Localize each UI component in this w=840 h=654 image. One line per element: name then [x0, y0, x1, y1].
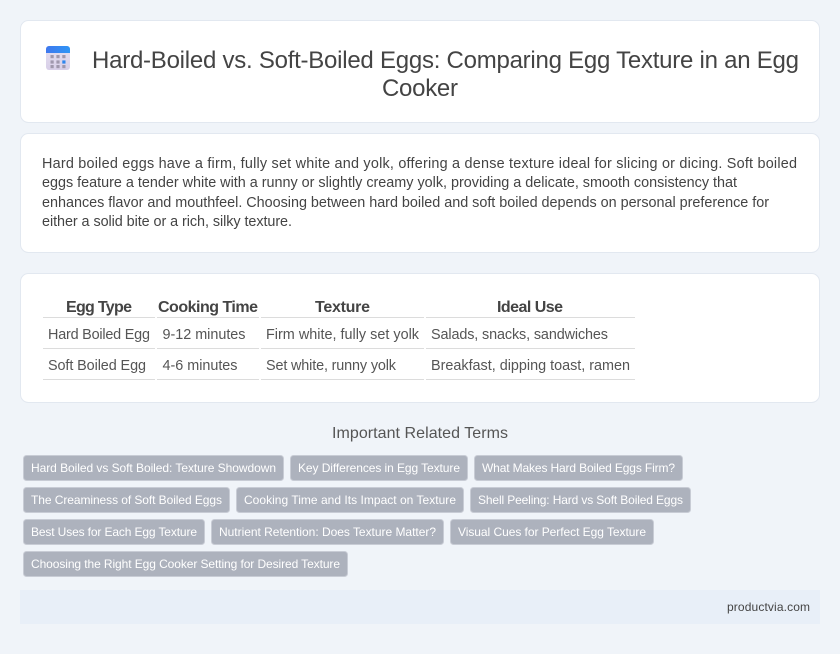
- related term tags: [24, 456, 690, 576]
- related term tags: Shell Peeling: Hard vs Soft Boiled Eggs: [478, 493, 683, 507]
- related term tags: Choosing the Right Egg Cooker Setting for Desired Texture: [31, 557, 340, 571]
- panel: summary paragraph: [20, 134, 820, 252]
- title: [92, 47, 799, 102]
- icon: calendar grid: [46, 46, 70, 70]
- related term tags: Nutrient Retention: Does Texture Matter?: [219, 525, 436, 539]
- text block: summary: either a solid bite or a rich, silky texture.: [42, 214, 292, 230]
- title: Cooker: [382, 75, 458, 102]
- table row: soft boiled egg: Set white, runny yolk: [266, 358, 397, 374]
- related term tags: Key Differences in Egg Texture: [298, 461, 460, 475]
- related term tags: What Makes Hard Boiled Eggs Firm?: [482, 461, 675, 475]
- table row: hard boiled egg: [48, 327, 608, 343]
- table row: soft boiled egg: 4-6 minutes: [162, 358, 238, 374]
- table row: hard boiled egg: 9-12 minutes: [162, 327, 246, 343]
- text block: summary: Hard boiled eggs have a firm, fully set white and yolk, offering a dense texture ideal for slicing or dicing. Soft boiled: [42, 156, 797, 172]
- table row: hard boiled egg: Salads, snacks, sandwiches: [431, 327, 608, 343]
- related term tags: Cooking Time and Its Impact on Texture: [244, 493, 456, 507]
- table row: soft boiled egg: [48, 358, 630, 374]
- table header: Texture: [315, 299, 370, 316]
- table row: soft boiled egg: Breakfast, dipping toast, ramen: [431, 358, 630, 374]
- text block: summary: [42, 156, 797, 230]
- panel: header: [20, 20, 820, 122]
- table header: Cooking Time: [158, 299, 258, 316]
- text block: summary: enhances flavor and mouthfeel. Choosing between hard boiled and soft boiled depends on personal preference for: [42, 195, 769, 211]
- text block: summary: eggs feature a tender white with a runny or slightly creamy yolk, providing a delicate, smooth consistency that: [42, 175, 737, 191]
- table header: [66, 299, 563, 316]
- table header: Ideal Use: [497, 299, 563, 316]
- related term tags: The Creaminess of Soft Boiled Eggs: [31, 493, 222, 507]
- footer: productvia.com: [727, 600, 810, 614]
- table row: hard boiled egg: Firm white, fully set yolk: [266, 327, 420, 343]
- table row: hard boiled egg: Hard Boiled Egg: [48, 327, 150, 343]
- related term tags: Best Uses for Each Egg Texture: [31, 525, 197, 539]
- table row: soft boiled egg: Soft Boiled Egg: [48, 358, 146, 374]
- heading: related terms: Important Related Terms: [332, 425, 508, 442]
- title: Hard-Boiled vs. Soft-Boiled Eggs: Comparing Egg Texture in an Egg: [92, 47, 799, 74]
- related term tags: Visual Cues for Perfect Egg Texture: [458, 525, 646, 539]
- table header: Egg Type: [66, 299, 132, 316]
- footer: [20, 590, 820, 624]
- related term tags: Hard Boiled vs Soft Boiled: Texture Showdown: [31, 461, 276, 475]
- panel: comparison table: [20, 274, 820, 402]
